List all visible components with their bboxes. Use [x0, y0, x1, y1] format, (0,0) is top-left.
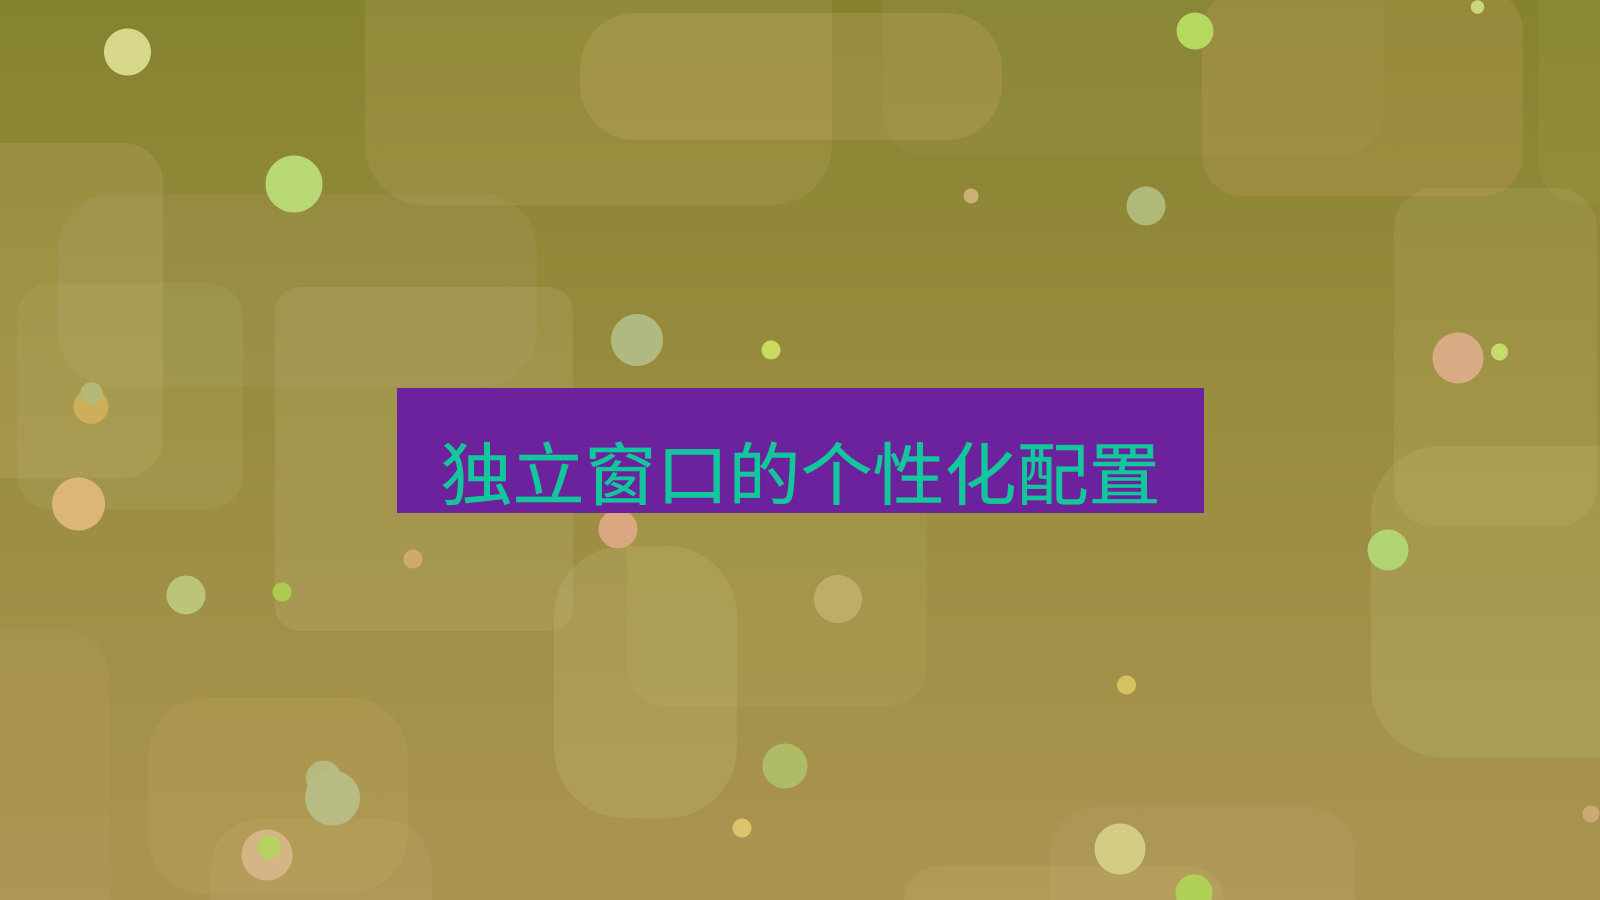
- dot: [257, 835, 281, 859]
- dot: [74, 389, 108, 424]
- rounded panel: top centre pill: [580, 13, 1002, 140]
- dot: [1094, 824, 1146, 874]
- dot: [1582, 806, 1600, 822]
- rounded panel: right tall: [1394, 188, 1597, 527]
- rounded panel: centre left: [275, 287, 573, 631]
- dot: [166, 576, 206, 614]
- dot: [404, 550, 422, 568]
- dot: [1176, 12, 1214, 50]
- dot: [611, 314, 663, 366]
- rounded panel: right lower: [1371, 446, 1600, 757]
- dot: [814, 575, 862, 623]
- dot: [598, 510, 638, 548]
- rounded panel: bottom left: [148, 697, 408, 894]
- rounded panel: left wide: [58, 194, 537, 387]
- dot: [266, 156, 322, 212]
- dot: [306, 760, 341, 796]
- rounded panel: centre wide: [627, 460, 927, 707]
- rounded panel: far right top: [1539, 0, 1600, 203]
- rounded panel: bottom left small: [210, 819, 432, 900]
- rounded panel: centre tall: [554, 546, 737, 818]
- dot: [1117, 676, 1136, 694]
- rounded panel: bottom centre: [904, 866, 1224, 900]
- dot: [762, 744, 808, 788]
- dot: [305, 770, 360, 826]
- dot: [1176, 874, 1212, 900]
- dot: [104, 28, 151, 76]
- dot: [80, 382, 102, 404]
- title banner: [397, 388, 1204, 513]
- dot: [762, 340, 780, 360]
- title banner: 独立窗口的个性化配置: [440, 439, 1160, 513]
- rounded panel: bottom right: [1050, 807, 1355, 900]
- rounded panel: left tall: [0, 143, 163, 478]
- dot: [1471, 0, 1484, 14]
- rounded panel: top centre large: [365, 0, 832, 205]
- rounded panel: bottom left edge: [0, 628, 110, 900]
- rounded panel: left lower: [17, 283, 243, 509]
- dot: [732, 818, 752, 838]
- rounded panel: top right orange: [1202, 0, 1523, 196]
- dot: [1491, 344, 1508, 360]
- dot: [1126, 186, 1166, 226]
- rounded panel: top right wide: [883, 0, 1384, 155]
- dot: [1432, 332, 1484, 384]
- dot: [52, 478, 105, 530]
- dot: [242, 830, 292, 880]
- dot: [964, 188, 978, 204]
- dot: [272, 582, 292, 602]
- dot: [1368, 530, 1408, 570]
